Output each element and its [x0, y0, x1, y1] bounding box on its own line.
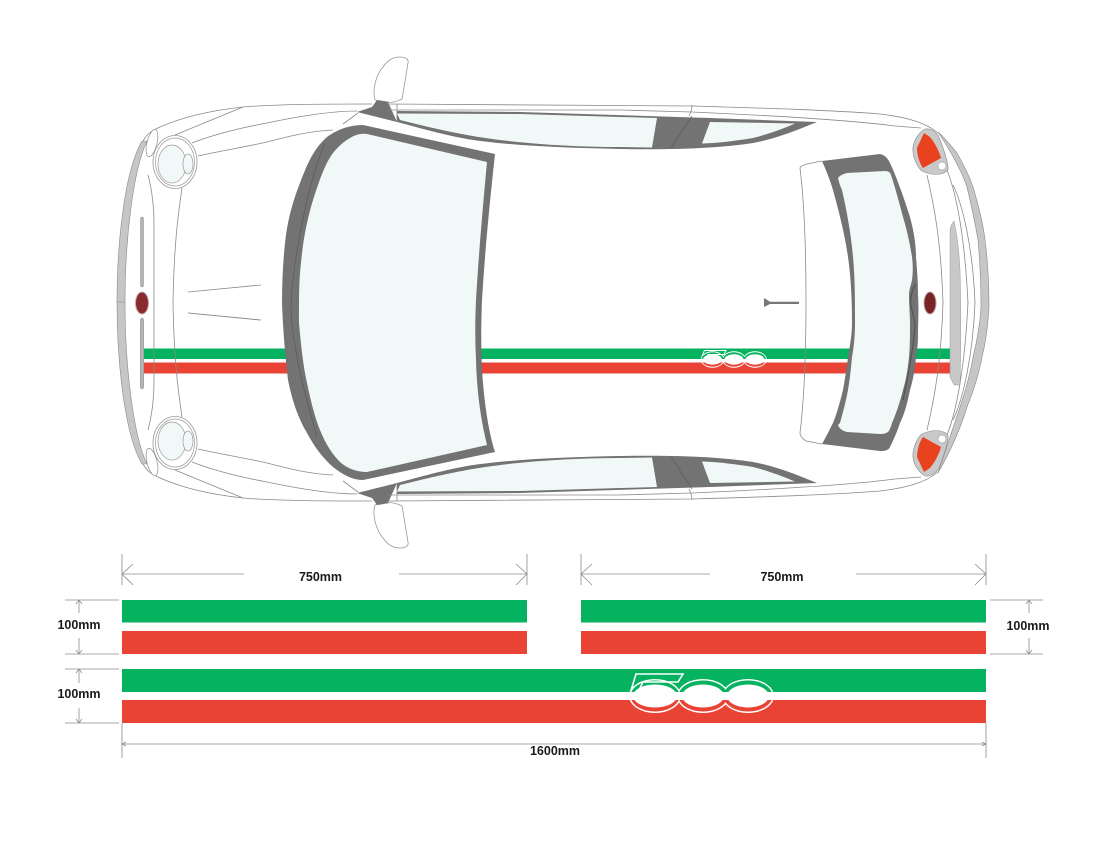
stripe set: 1600mm [122, 669, 986, 723]
large 500 logo [630, 673, 774, 713]
car top view [117, 57, 989, 548]
label: 100mm lower left: 100mm [57, 687, 101, 701]
label: 750mm left: 750mm [299, 570, 342, 584]
dimension: left 100mm upper [57, 600, 119, 654]
hood crease lines [142, 303, 260, 320]
dimension: left 100mm lower [57, 669, 119, 723]
car stripes: green and red [144, 348, 950, 374]
dimension: left 750mm [122, 554, 527, 585]
label: 1600mm: 1600mm [530, 744, 580, 758]
windscreen [282, 125, 495, 480]
stripe set: left 750mm [122, 600, 527, 654]
label: 100mm right: 100mm [1006, 619, 1050, 633]
car lower half outline [117, 302, 975, 548]
dimension: 1600mm [122, 723, 986, 758]
front badge [136, 292, 148, 314]
antenna [764, 298, 799, 307]
rear hatch [800, 154, 918, 451]
rear bumper band [938, 132, 989, 473]
car upper half outline [117, 57, 975, 303]
stripe set: right 750mm [581, 600, 986, 654]
dimension: right 750mm [581, 554, 986, 585]
dimension: right 100mm [990, 600, 1050, 654]
label: 750mm right: 750mm [760, 570, 804, 584]
small 500 logo on car [700, 350, 767, 368]
rear badge [924, 292, 936, 314]
rear bumper slot [950, 221, 961, 385]
label: 100mm upper left: 100mm [57, 618, 101, 632]
front grille slot [140, 320, 144, 389]
